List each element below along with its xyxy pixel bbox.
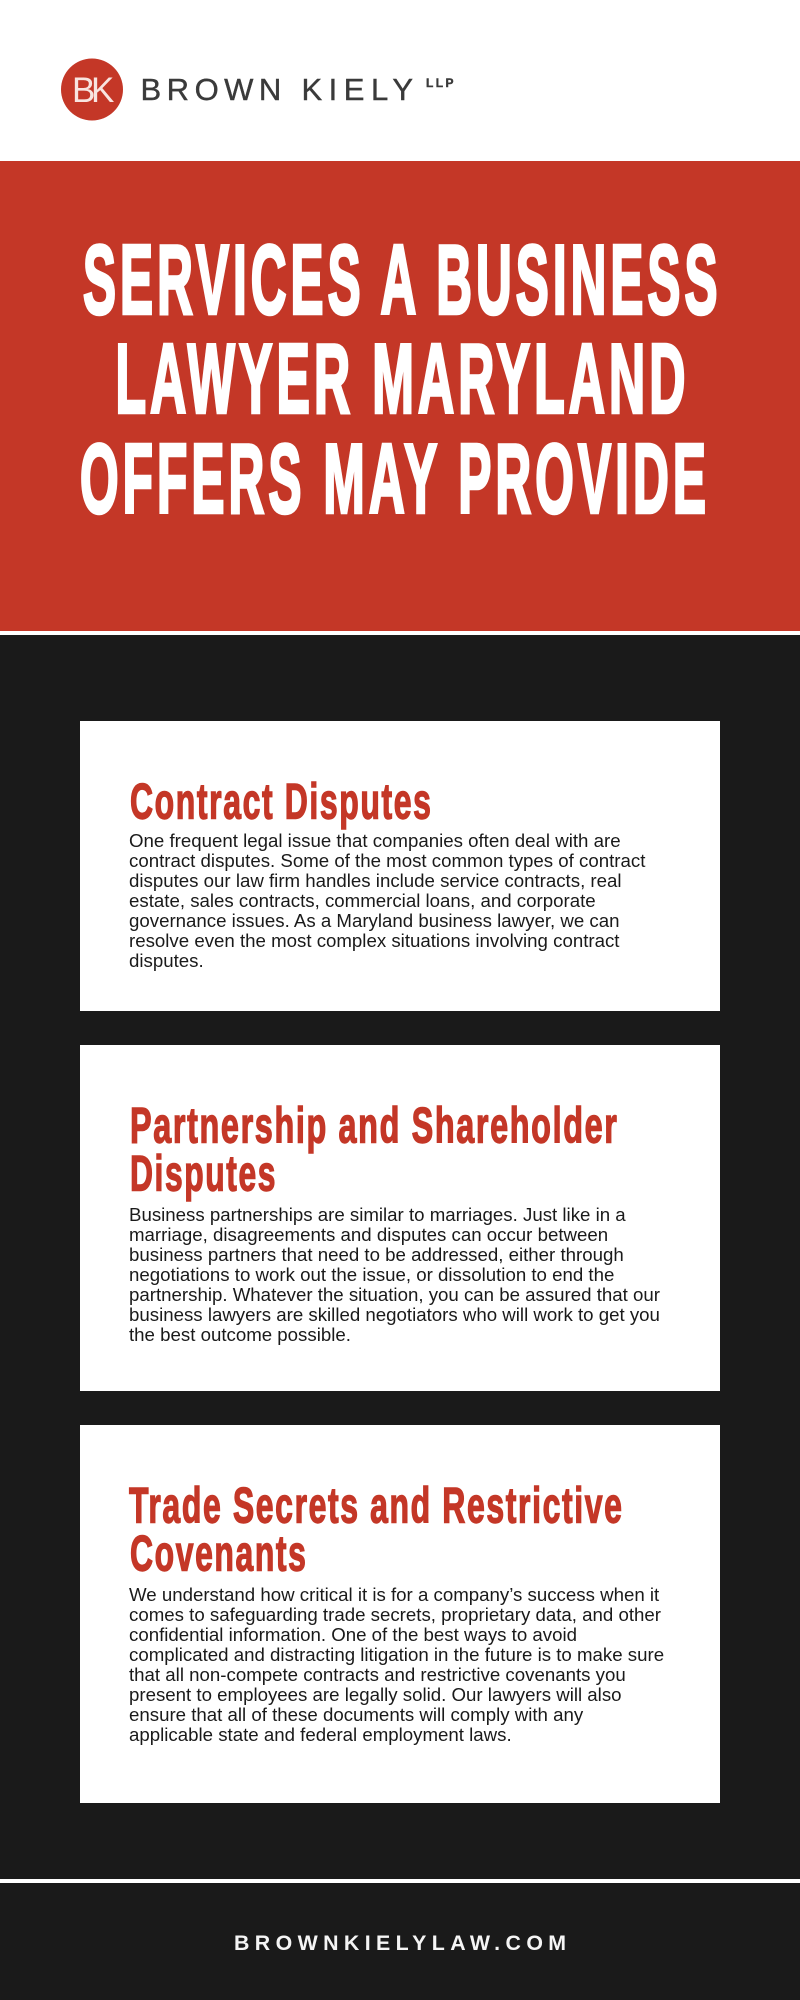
- icon: BK monogram circle: [61, 58, 123, 120]
- text block: partnership and shareholder disputes: [129, 1204, 660, 1345]
- text block: trade secrets and restrictive covenants: present to employees are legally solid. Our lawyers will also: [129, 1684, 622, 1705]
- text block: partnership and shareholder disputes: marriage, disagreements and disputes can occur between: [129, 1224, 608, 1245]
- icon: BK monogram circle: B: [72, 71, 95, 110]
- heading: contract disputes: Contract Disputes: [130, 774, 432, 830]
- text block: contract disputes: estate, sales contracts, commercial loans, and corporate: [129, 890, 596, 911]
- text block: contract disputes: disputes our law firm handles include service contracts, real: [129, 870, 622, 891]
- panel: contract disputes: [80, 721, 720, 1011]
- footer website: BROWNKIELYLAW.COM: [234, 1931, 571, 1955]
- text block: contract disputes: disputes.: [129, 950, 204, 971]
- logo wordmark: BROWN: [140, 72, 287, 107]
- header band: [0, 0, 800, 161]
- text block: partnership and shareholder disputes: negotiations to work out the issue, or dissolution to end the: [129, 1264, 614, 1285]
- logo wordmark: LLP: [426, 76, 456, 90]
- text block: trade secrets and restrictive covenants: confidential information. One of the best ways to avoid: [129, 1624, 577, 1645]
- text block: trade secrets and restrictive covenants: that all non-compete contracts and restrictive covenants you: [129, 1664, 626, 1685]
- text block: partnership and shareholder disputes: the best outcome possible.: [129, 1324, 351, 1345]
- icon: BK monogram circle: K: [91, 71, 114, 110]
- title banner: [0, 161, 800, 631]
- text block: contract disputes: contract disputes. Some of the most common types of contract: [129, 850, 646, 871]
- text block: partnership and shareholder disputes: business lawyers are skilled negotiators who will work to get you: [129, 1304, 660, 1325]
- panel: partnership and shareholder disputes: [80, 1045, 720, 1391]
- heading: partnership and shareholder disputes: [130, 1098, 618, 1202]
- text block: trade secrets and restrictive covenants: ensure that all of these documents will comply with any: [129, 1704, 584, 1725]
- text block: trade secrets and restrictive covenants: We understand how critical it is for a company’s success when it: [129, 1584, 660, 1605]
- text block: partnership and shareholder disputes: Business partnerships are similar to marriages. Just like in a: [129, 1204, 626, 1225]
- logo wordmark: [140, 72, 456, 107]
- title: [80, 224, 722, 533]
- text block: partnership and shareholder disputes: partnership. Whatever the situation, you can be assured that our: [129, 1284, 660, 1305]
- heading: trade secrets and restrictive covenants: [129, 1478, 624, 1582]
- text block: trade secrets and restrictive covenants: applicable state and federal employment laws.: [129, 1724, 512, 1745]
- panel: trade secrets and restrictive covenants: [80, 1425, 720, 1803]
- text block: contract disputes: governance issues. As a Maryland business lawyer, we can: [129, 910, 620, 931]
- text block: contract disputes: [129, 830, 646, 971]
- text block: contract disputes: resolve even the most complex situations involving contract: [129, 930, 620, 951]
- heading: partnership and shareholder disputes: Disputes: [130, 1146, 277, 1202]
- text block: trade secrets and restrictive covenants: complicated and distracting litigation in the future is to make sure: [129, 1644, 664, 1665]
- heading: trade secrets and restrictive covenants: Covenants: [130, 1526, 308, 1582]
- text block: trade secrets and restrictive covenants: [129, 1584, 664, 1745]
- text block: contract disputes: One frequent legal issue that companies often deal with are: [129, 830, 621, 851]
- text block: partnership and shareholder disputes: business partners that need to be addressed, either through: [129, 1244, 624, 1265]
- text block: trade secrets and restrictive covenants: comes to safeguarding trade secrets, proprietary data, and other: [129, 1604, 661, 1625]
- logo wordmark: KIELY: [302, 72, 420, 107]
- logo: [61, 58, 456, 120]
